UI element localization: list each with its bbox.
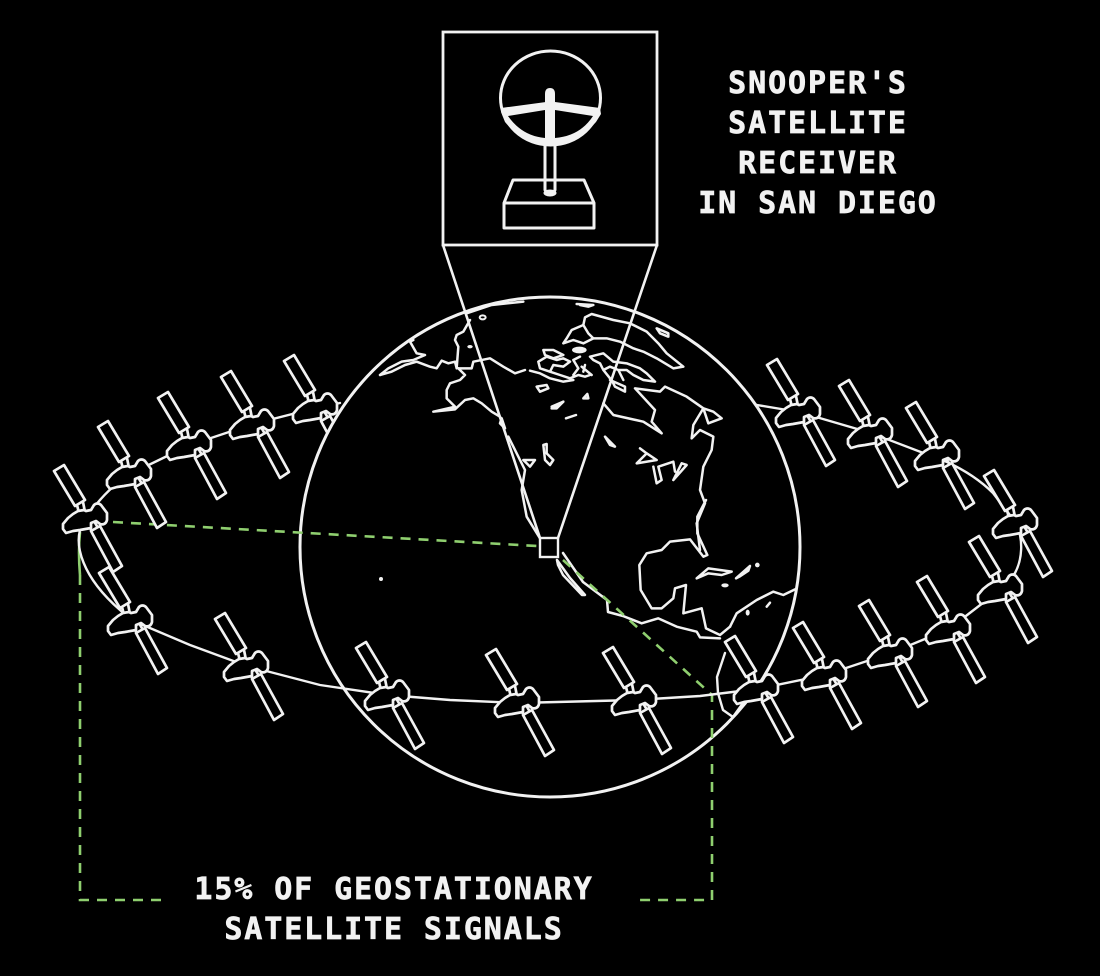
- Jamaica: [721, 583, 729, 587]
- central islands: [530, 325, 655, 392]
- panel: receiver inset: [443, 32, 657, 245]
- islands: [467, 345, 473, 348]
- heading: receiver label: [698, 66, 938, 221]
- satellites: lower left and centre: [99, 567, 671, 756]
- Alaska coast: [433, 368, 503, 427]
- caption: signal share: 15% OF GEOSTATIONARY: [194, 872, 594, 907]
- caption: signal share: [194, 872, 594, 947]
- zoom lines from San Diego to inset: [443, 245, 657, 538]
- Hispaniola: [736, 566, 750, 578]
- map: Gulf of Mexico and Central America: [557, 500, 795, 638]
- Arctic rim: [467, 302, 523, 313]
- orbit line: upper back arc: [87, 403, 340, 517]
- caption: signal share: SATELLITE SIGNALS: [224, 912, 564, 947]
- Hudson Bay coast: [603, 387, 722, 550]
- inland lakes: [543, 402, 615, 465]
- Florida and Gulf coast: [639, 500, 730, 635]
- San Diego marker square: [540, 538, 558, 557]
- heading: receiver label: RECEIVER: [738, 146, 898, 181]
- Baja California: [557, 560, 585, 595]
- coast mark: [767, 603, 770, 607]
- dish feed: [545, 88, 555, 145]
- island oval: [480, 315, 486, 319]
- Siberia tip: [380, 320, 470, 375]
- orbit line: front arc: [79, 530, 1001, 703]
- South America north coast: [730, 589, 795, 627]
- map: Hudson Bay and Atlantic coast: [500, 387, 722, 550]
- Lake Maracaibo: [746, 610, 750, 616]
- central dense cluster: [572, 347, 587, 353]
- dish cutouts: [508, 110, 593, 138]
- icon: satellite dish receiver: [500, 51, 601, 228]
- Pacific coast of Mexico: [563, 553, 720, 638]
- Great Lakes: [637, 448, 687, 483]
- post foot: [544, 190, 556, 196]
- Hawaii: [379, 577, 383, 581]
- satellite: behind globe upper left: [284, 355, 352, 462]
- inset frame: [443, 32, 657, 245]
- green dashed signal coverage: [79, 522, 712, 900]
- satellites: upper left: [54, 371, 289, 572]
- dish inner band: [501, 102, 601, 146]
- Baffin Island: [583, 314, 683, 368]
- Canadian west coast detail: [500, 418, 540, 538]
- dish ring: [500, 51, 600, 145]
- heading: receiver label: SNOOPER'S: [728, 66, 908, 101]
- globe: [300, 297, 800, 797]
- Puerto Rico: [755, 563, 760, 567]
- heading: receiver label: IN SAN DIEGO: [698, 186, 938, 221]
- South America lower edge: [717, 653, 743, 717]
- Arctic coast: [458, 358, 525, 373]
- northern islands: [577, 304, 668, 337]
- satellites: right: [725, 359, 1052, 743]
- orbit line: right back arc: [757, 405, 1021, 589]
- dish base: [504, 180, 594, 228]
- Victoria Island dots: [537, 385, 588, 407]
- Cuba: [697, 568, 732, 578]
- heading: receiver label: SATELLITE: [728, 106, 908, 141]
- map: Alaska and Yukon: [380, 302, 525, 427]
- dish post: [545, 145, 555, 194]
- map: Canadian Arctic archipelago: [530, 304, 683, 407]
